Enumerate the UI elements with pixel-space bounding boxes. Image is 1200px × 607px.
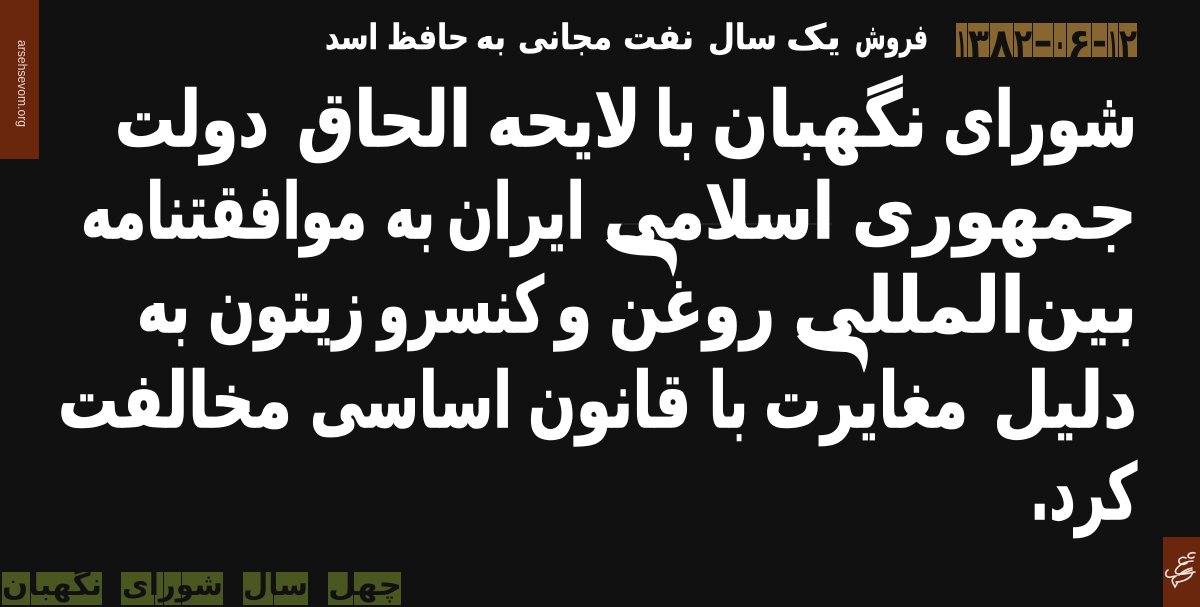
headline line 1: لایحه [487,76,641,165]
headline line 4: مخالفت [58,357,292,446]
side tab: website [0,0,39,159]
date badge: - [1092,19,1107,65]
headline [58,75,1137,538]
subheading: نفت [623,18,694,58]
headline line 3: المللی [793,262,1025,351]
headline line 4: با [709,357,748,446]
headline line 3: زیتون [208,262,365,351]
headline line 3: روغن [609,262,775,351]
subheading: یک [786,18,841,58]
headline line 4: دلیل [993,357,1137,446]
date badge: - [1033,19,1053,65]
headline line 5: کرد. [1030,449,1137,538]
date badge: ۱ [1108,21,1118,67]
headline line 2 [81,168,1137,257]
headline line 1: الحاق [297,76,471,165]
subheading: اسد [325,18,378,58]
headline line 2: اسلامی [604,168,834,257]
headline line 3: و [553,262,592,351]
footer series title: شورای [122,567,223,603]
subheading: سال [708,18,777,58]
footer series title: چهل [328,567,402,603]
date badge: ۰ [1054,21,1066,67]
headline line 1: با [655,76,696,165]
subheading [325,18,928,58]
headline line 3: کنسرو [375,262,544,351]
headline line 3: بین [1025,262,1137,351]
side tab: website: arsehsevom.org [15,40,30,127]
date badge: ۱ [956,21,966,67]
date badge: ۸ [990,21,1013,67]
headline line 1 [115,75,1137,165]
date badge: ۶ [1067,21,1091,67]
date badge: ۲ [1014,21,1032,67]
subheading: حافظ [387,18,469,58]
subheading: فروش [855,18,928,58]
headline line 1: نگهبان [712,75,927,165]
footer series title [2,566,402,605]
headline line 4 [58,357,1137,446]
headline line 2: موافقتنامه [81,168,367,257]
subheading: مجانی [518,18,612,58]
footer series title: نگهبان [2,566,102,603]
headline line 2: به [385,168,435,257]
swash tails [606,235,868,373]
headline line 4: قانون [528,357,691,446]
headline line 1: دولت [115,76,269,165]
headline line 4: اساسی [310,357,512,446]
headline line 2: ایران [447,168,585,257]
headline line 2: جمهوری [852,168,1137,257]
headline line 4: مغایرت [764,357,968,446]
icon: calligraphic logo [1166,553,1195,587]
headline line 3 [137,262,1137,351]
date badge: ۲ [1119,21,1137,67]
headline line 3: به [137,262,190,351]
date badge [956,19,1137,67]
date badge: ۳ [968,21,989,67]
footer series title: سال [243,567,308,603]
logo tab [1163,537,1200,607]
subheading: به [476,18,506,58]
